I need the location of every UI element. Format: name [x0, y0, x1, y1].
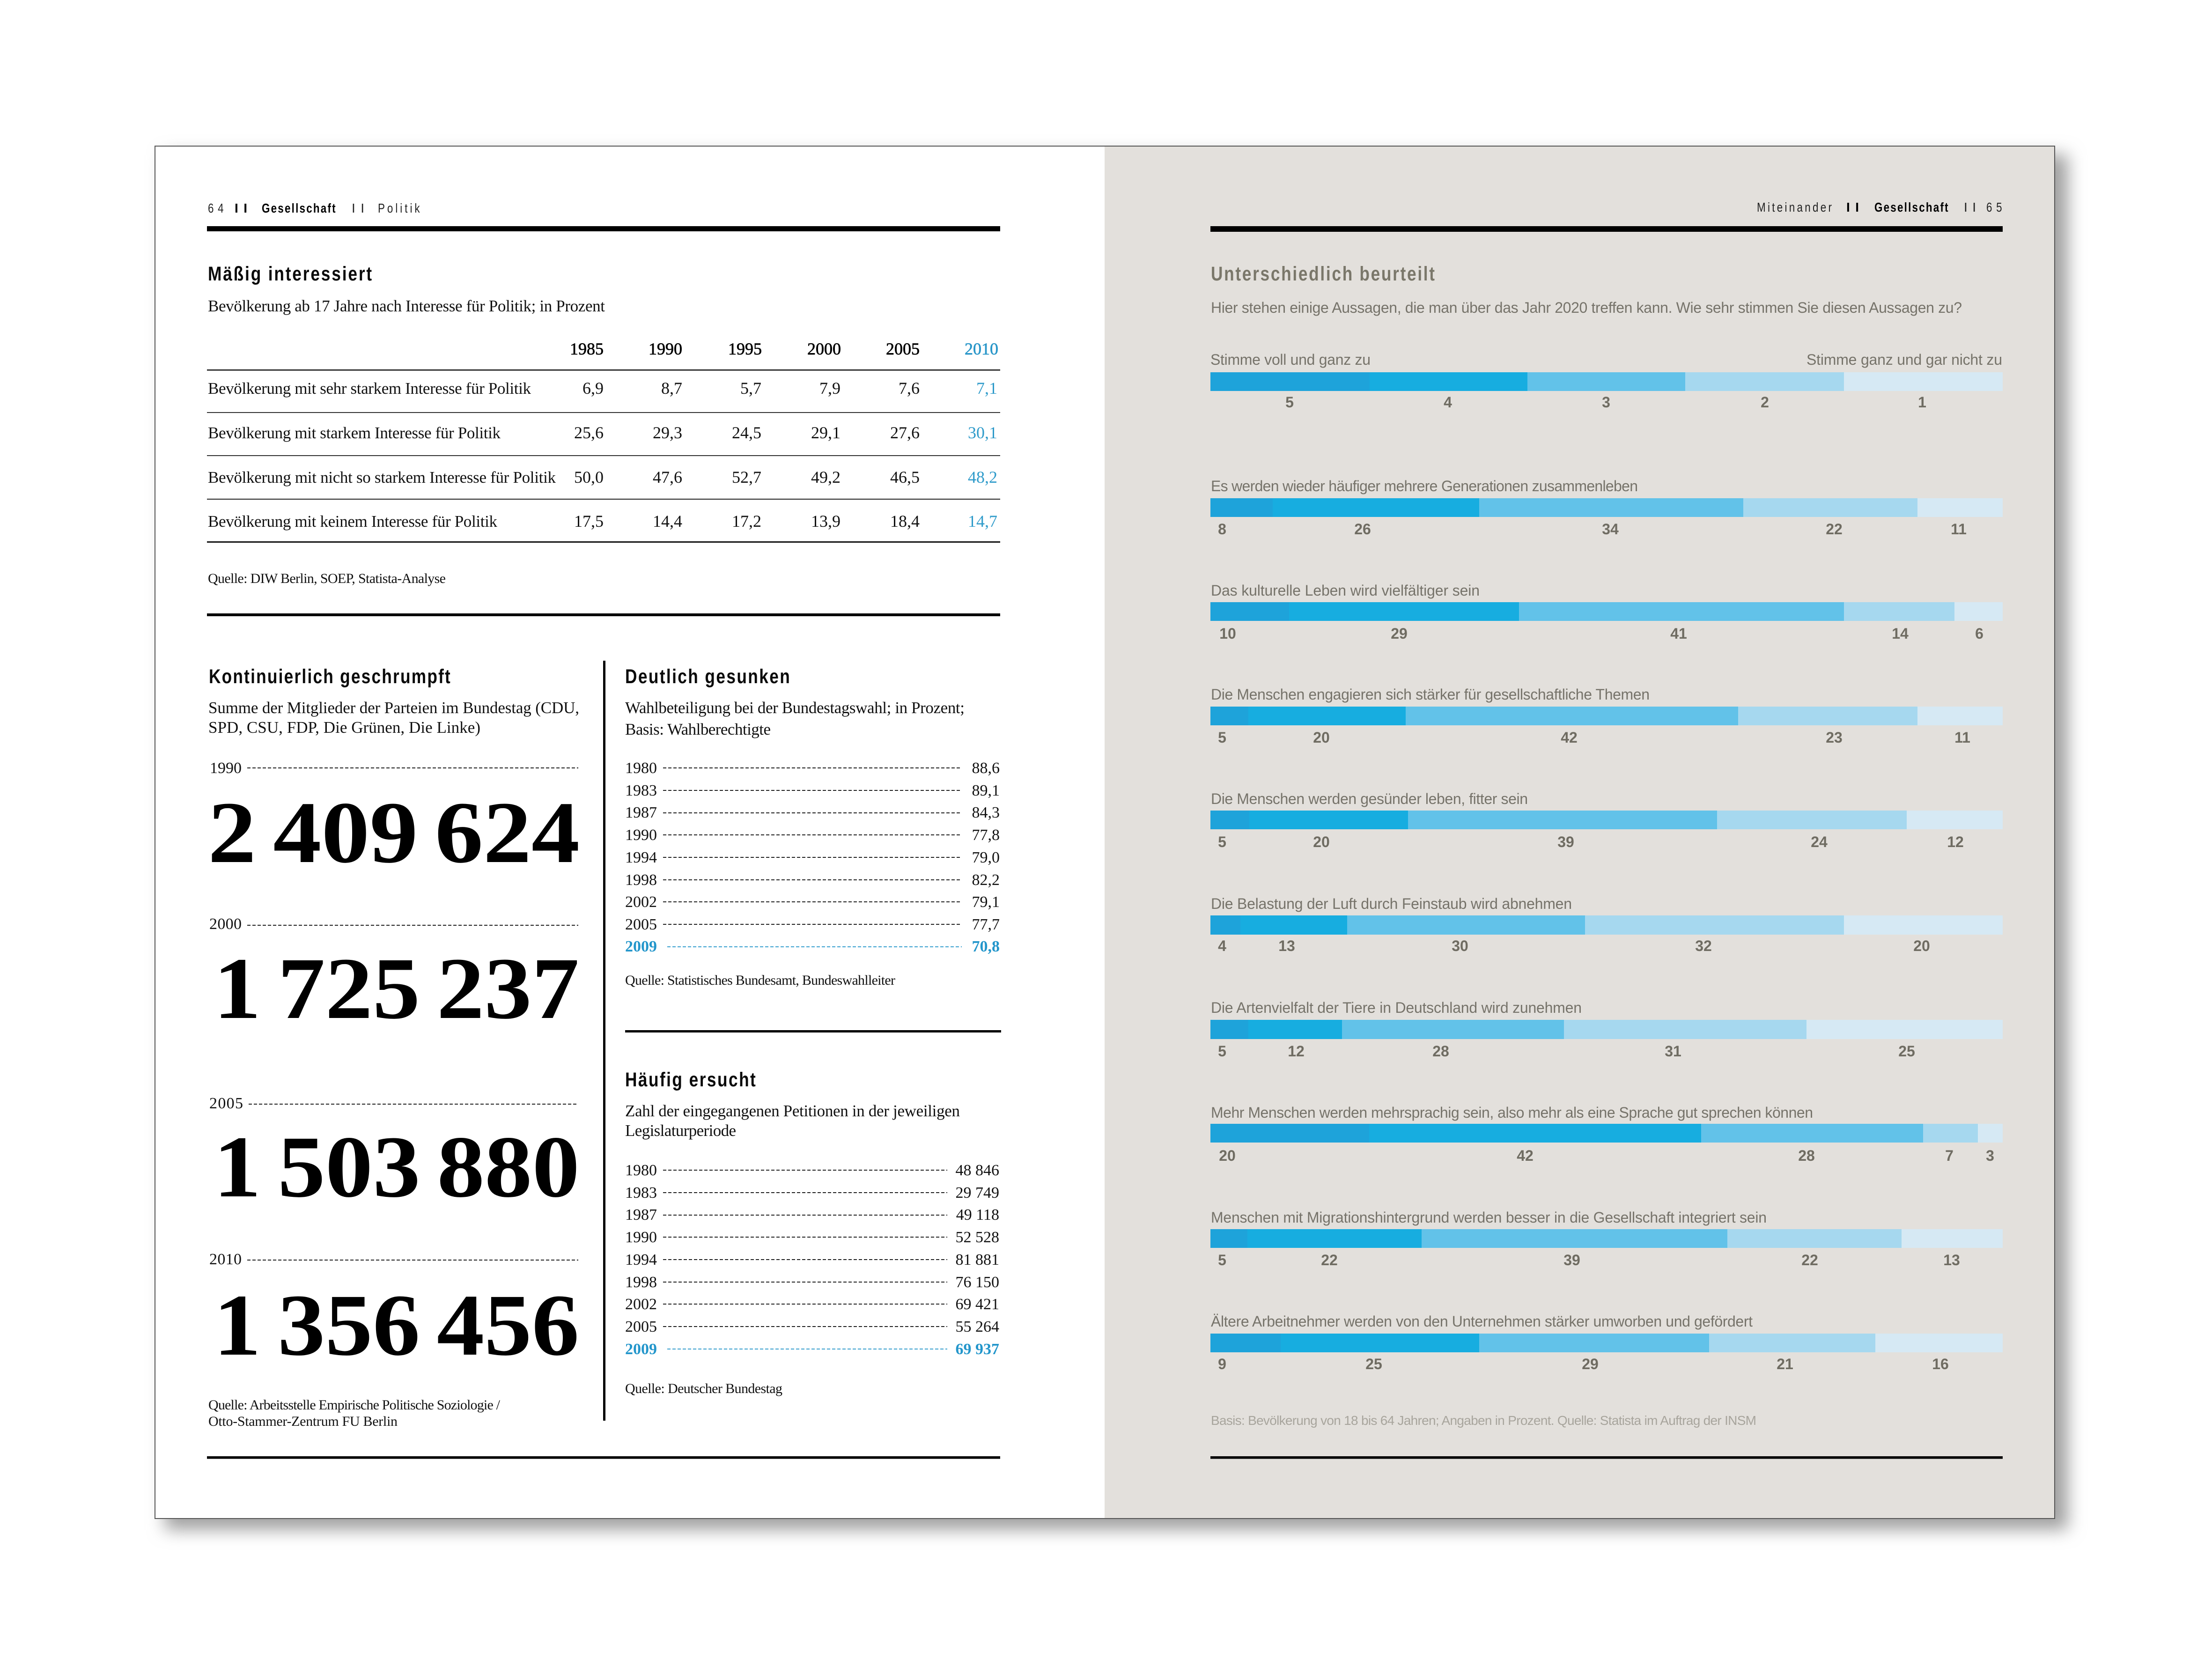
statement bar: Generationen: 26 — [1354, 521, 1371, 538]
table header years: 1990 — [649, 339, 682, 358]
table header years: 2000 — [807, 339, 841, 358]
table row: starkes Interesse: 25,6 — [574, 423, 604, 442]
statement bar: Artenvielfalt — [1210, 999, 2003, 1060]
table row: starkes Interesse: 24,5 — [732, 423, 761, 442]
table row: kein Interesse: 13,9 — [811, 512, 841, 531]
left page header: II — [235, 201, 247, 215]
table row: sehr starkes Interesse: 7,9 — [819, 379, 841, 398]
statement bar: kulturelles Leben: 41 — [1670, 625, 1687, 642]
statement bar: Gesundheit — [1210, 790, 2003, 850]
statement bar: Migrationshintergrund: 13 — [1943, 1252, 1960, 1268]
turnout list: 2009 — [625, 938, 657, 955]
statement bar: Feinstaub: Die Belastung der Luft durch Feinstaub wird abnehmen — [1211, 895, 1572, 912]
statement bar: Feinstaub: 32 — [1695, 937, 1712, 954]
source note: Basis: Bevölkerung von 18 bis 64 Jahren; Angaben in Prozent. Quelle: Statista im Auftrag der INSM — [1211, 1413, 1756, 1428]
petitions list: 1987 — [625, 1206, 657, 1224]
table row: kein Interesse — [208, 512, 997, 531]
member count 2005: 2005 — [209, 1095, 243, 1112]
left page header: Gesellschaft — [262, 201, 336, 216]
table row: starkes Interesse: 29,1 — [811, 423, 841, 442]
table row: sehr starkes Interesse: 7,1 — [976, 379, 997, 398]
turnout list: 1980 — [625, 759, 657, 777]
table row: kein Interesse: 14,4 — [653, 512, 682, 531]
statement bar: Migrationshintergrund: 39 — [1563, 1252, 1580, 1268]
statement bar: Engagement: Die Menschen engagieren sich stärker für gesellschaftliche Themen — [1211, 686, 1650, 703]
statement bar: Mehrsprachigkeit: 20 — [1219, 1147, 1236, 1164]
turnout list: 84,3 — [972, 804, 1000, 821]
statement bar: Migrationshintergrund: Menschen mit Migrationshintergrund werden besser in die Gesellschaft integriert sein — [1211, 1209, 1767, 1226]
subtitle: Hier stehen einige Aussagen, die man über das Jahr 2020 treffen kann. Wie sehr stimmen Sie diesen Aussagen zu? — [1211, 299, 1962, 316]
page drop shadow — [165, 155, 2068, 1530]
right page header: II — [1964, 200, 1976, 214]
legend scale bar: 3 — [1602, 394, 1610, 411]
table row: starkes Interesse: 29,3 — [653, 423, 682, 442]
right page header — [1757, 200, 2002, 215]
source: Quelle: DIW Berlin, SOEP, Statista-Analyse — [208, 571, 446, 586]
turnout list: 1994 — [625, 849, 657, 866]
panel: Deutlich gesunken — [625, 665, 1000, 988]
table row: starkes Interesse: 27,6 — [890, 423, 920, 442]
petitions list: 2009 — [625, 1341, 657, 1358]
left page background — [155, 146, 1105, 1519]
turnout list: 77,8 — [972, 826, 1000, 844]
turnout list: 2002 — [625, 893, 657, 911]
statement bar: Ältere Arbeitnehmer: 9 — [1218, 1356, 1226, 1372]
right page background — [1105, 146, 2055, 1519]
table row: starkes Interesse — [208, 423, 997, 442]
statement bar: Ältere Arbeitnehmer: 16 — [1932, 1356, 1949, 1372]
petitions list: 1998 — [625, 1274, 657, 1291]
heading: Kontinuierlich geschrumpft — [209, 665, 450, 688]
left page header — [208, 201, 420, 216]
table row: nicht so starkes Interesse: Bevölkerung mit nicht so starkem Interesse für Politik — [208, 468, 556, 487]
member count 2000: 2000 — [209, 915, 242, 933]
statement bar: Mehrsprachigkeit: Mehr Menschen werden mehrsprachig sein, also mehr als eine Sprache gut sprechen können — [1211, 1104, 1813, 1121]
right page header: Gesellschaft — [1874, 200, 1948, 215]
member count 2005: 1 503 880 — [214, 1118, 580, 1216]
legend scale bar: 1 — [1918, 394, 1926, 411]
petitions list: 1980 — [625, 1162, 657, 1179]
member count 2010: 2010 — [209, 1251, 242, 1268]
legend scale bar: 4 — [1444, 394, 1452, 411]
subtitle: Basis: Wahlberechtigte — [625, 720, 771, 738]
statement bar: Feinstaub: 30 — [1452, 937, 1468, 954]
legend scale bar — [1210, 351, 2003, 411]
petitions list: 81 881 — [955, 1251, 999, 1268]
subtitle — [625, 1102, 960, 1140]
table row: nicht so starkes Interesse: 52,7 — [732, 468, 761, 487]
petitions list: 76 150 — [955, 1274, 999, 1291]
table row: nicht so starkes Interesse — [208, 468, 997, 487]
petitions list: 52 528 — [955, 1229, 999, 1246]
petitions list: 2005 — [625, 1318, 657, 1335]
table row: nicht so starkes Interesse: 46,5 — [890, 468, 920, 487]
member count 1990: 2 409 624 — [208, 783, 580, 881]
petitions list: 1983 — [625, 1184, 657, 1202]
subtitle — [208, 699, 579, 737]
table row: sehr starkes Interesse: 6,9 — [582, 379, 604, 398]
table row: sehr starkes Interesse — [208, 379, 997, 398]
statement bar: Engagement: 5 — [1218, 729, 1226, 746]
turnout list: 88,6 — [972, 759, 1000, 777]
statement bar: Migrationshintergrund: 5 — [1218, 1252, 1226, 1268]
table row: nicht so starkes Interesse: 48,2 — [968, 468, 997, 487]
statement bar: Artenvielfalt: 25 — [1898, 1043, 1915, 1060]
statement bar: Mehrsprachigkeit: 7 — [1945, 1147, 1954, 1164]
petitions list: 55 264 — [955, 1318, 999, 1335]
statement bar: kulturelles Leben: Das kulturelle Leben wird vielfältiger sein — [1211, 582, 1480, 599]
left page header: II — [352, 201, 364, 215]
statement bar: Mehrsprachigkeit: 28 — [1798, 1147, 1815, 1164]
statement bar: Mehrsprachigkeit: 3 — [1986, 1147, 1994, 1164]
table row: kein Interesse: 17,2 — [732, 512, 761, 531]
statement bar: Artenvielfalt: Die Artenvielfalt der Tiere in Deutschland wird zunehmen — [1211, 999, 1582, 1016]
page outline — [155, 146, 2055, 1519]
table row: kein Interesse: Bevölkerung mit keinem Interesse für Politik — [208, 512, 497, 531]
table row: kein Interesse: 18,4 — [890, 512, 920, 531]
statement bar: kulturelles Leben: 6 — [1975, 625, 1983, 642]
statement bar: kulturelles Leben: 10 — [1219, 625, 1236, 642]
source — [208, 1397, 501, 1429]
right page header: 65 — [1986, 200, 2002, 215]
heading: Unterschiedlich beurteilt — [1211, 263, 1435, 285]
petitions list: 1990 — [625, 1229, 657, 1246]
statement bar: kulturelles Leben — [1210, 582, 2003, 642]
statement bar: Ältere Arbeitnehmer: 29 — [1582, 1356, 1599, 1372]
petitions list — [625, 1162, 999, 1358]
table row: sehr starkes Interesse: 7,6 — [899, 379, 920, 398]
right page header: Miteinander — [1757, 200, 1832, 215]
statement bar: Migrationshintergrund: 22 — [1321, 1252, 1338, 1268]
table header years — [570, 339, 998, 358]
table header years: 1995 — [728, 339, 762, 358]
statement bar: Generationen — [1210, 478, 2003, 538]
source: Quelle: Statistisches Bundesamt, Bundeswahlleiter — [625, 973, 895, 988]
table row: starkes Interesse: 30,1 — [968, 423, 997, 442]
statement bar: Artenvielfalt: 28 — [1432, 1043, 1449, 1060]
table row: kein Interesse: 17,5 — [574, 512, 604, 531]
table row: kein Interesse: 14,7 — [968, 512, 997, 531]
turnout list: 82,2 — [972, 871, 1000, 889]
legend scale bar: Stimme ganz und gar nicht zu — [1806, 351, 2002, 368]
statement bar: Gesundheit: 20 — [1313, 833, 1330, 850]
turnout list: 89,1 — [972, 782, 1000, 799]
statement bar: Generationen: 22 — [1826, 521, 1843, 538]
subtitle: Bevölkerung ab 17 Jahre nach Interesse für Politik; in Prozent — [208, 297, 605, 315]
subtitle — [625, 699, 965, 738]
statement bar: Engagement: 11 — [1954, 729, 1970, 746]
turnout list: 79,1 — [972, 893, 1000, 911]
statement bar: Artenvielfalt: 5 — [1218, 1043, 1226, 1060]
table row: starkes Interesse: Bevölkerung mit starkem Interesse für Politik — [208, 424, 501, 442]
turnout list: 1987 — [625, 804, 657, 821]
statement bar: Ältere Arbeitnehmer: 21 — [1777, 1356, 1793, 1372]
turnout list: 2005 — [625, 916, 657, 933]
table row: nicht so starkes Interesse: 49,2 — [811, 468, 841, 487]
statement bar: Ältere Arbeitnehmer — [1210, 1313, 2003, 1372]
source: Otto-Stammer-Zentrum FU Berlin — [208, 1414, 398, 1429]
statement bar: Engagement: 20 — [1313, 729, 1330, 746]
statement bar: Gesundheit: 39 — [1557, 833, 1574, 850]
subtitle: Zahl der eingegangenen Petitionen in der jeweiligen — [625, 1102, 960, 1120]
petitions list: 2002 — [625, 1296, 657, 1313]
petitions list: 1994 — [625, 1251, 657, 1268]
subtitle: Wahlbeteiligung bei der Bundestagswahl; in Prozent; — [625, 699, 965, 717]
panel: Mäßig interessiert table — [207, 263, 1000, 586]
petitions list: 49 118 — [956, 1206, 999, 1224]
panel: Unterschiedlich beurteilt — [1210, 263, 2003, 1428]
statement bar: Ältere Arbeitnehmer: 25 — [1365, 1356, 1382, 1372]
statement bar: Generationen: Es werden wieder häufiger mehrere Generationen zusammenleben — [1211, 478, 1638, 494]
table row: nicht so starkes Interesse: 47,6 — [653, 468, 682, 487]
member count 2000: 1 725 237 — [214, 939, 579, 1037]
right page header: II — [1846, 200, 1859, 214]
heading: Deutlich gesunken — [625, 665, 790, 688]
statement bar: Artenvielfalt: 31 — [1665, 1043, 1681, 1060]
statement bar: Migrationshintergrund: 22 — [1801, 1252, 1818, 1268]
left page header: 64 — [208, 201, 224, 216]
subtitle: SPD, CSU, FDP, Die Grünen, Die Linke) — [208, 718, 480, 737]
table header years: 2010 — [965, 339, 998, 358]
statement bar: Feinstaub: 20 — [1913, 937, 1930, 954]
turnout list: 77,7 — [972, 916, 1000, 933]
heading: Mäßig interessiert — [208, 263, 372, 285]
table header years: 1985 — [570, 339, 604, 358]
statement bar: Gesundheit: 5 — [1218, 833, 1226, 850]
statement bar: Engagement: 23 — [1826, 729, 1843, 746]
turnout list: 1983 — [625, 782, 657, 799]
statement bar: Gesundheit: Die Menschen werden gesünder leben, fitter sein — [1211, 790, 1528, 807]
left page header: Politik — [378, 201, 420, 216]
statement bar: kulturelles Leben: 14 — [1892, 625, 1909, 642]
table row: sehr starkes Interesse: 5,7 — [740, 379, 761, 398]
statement bar: Generationen: 11 — [1951, 521, 1967, 538]
statement bar: Generationen: 8 — [1218, 521, 1226, 538]
turnout list: 1990 — [625, 826, 657, 844]
petitions list: 69 421 — [955, 1296, 999, 1313]
table row: sehr starkes Interesse: Bevölkerung mit sehr starkem Interesse für Politik — [208, 379, 531, 398]
table header years: 2005 — [886, 339, 920, 358]
statement bar: Gesundheit: 12 — [1947, 833, 1964, 850]
legend scale bar: Stimme voll und ganz zu — [1210, 351, 1371, 368]
subtitle: Legislaturperiode — [625, 1121, 736, 1140]
source: Quelle: Deutscher Bundestag — [625, 1381, 782, 1396]
statement bar: Mehrsprachigkeit — [1210, 1104, 2003, 1164]
statement bar: Engagement — [1210, 686, 2003, 746]
member count 2010: 1 356 456 — [214, 1276, 579, 1374]
turnout list — [625, 759, 1000, 955]
petitions list: 48 846 — [955, 1162, 999, 1179]
subtitle: Summe der Mitglieder der Parteien im Bundestag (CDU, — [208, 699, 579, 717]
legend scale bar: 2 — [1761, 394, 1769, 411]
table row: nicht so starkes Interesse: 50,0 — [574, 468, 604, 487]
statement bar: Mehrsprachigkeit: 42 — [1517, 1147, 1534, 1164]
panel: Kontinuierlich geschrumpft — [208, 665, 580, 1429]
source: Quelle: Arbeitsstelle Empirische Politische Soziologie / — [208, 1397, 501, 1413]
statement bar: Feinstaub — [1210, 895, 2003, 954]
legend scale bar: 5 — [1285, 394, 1294, 411]
heading: Häufig ersucht — [625, 1069, 756, 1091]
panel: Häufig ersucht — [625, 1069, 999, 1396]
turnout list: 1998 — [625, 871, 657, 889]
petitions list: 29 749 — [955, 1184, 999, 1202]
statement bar: kulturelles Leben: 29 — [1391, 625, 1408, 642]
petitions list: 69 937 — [955, 1341, 999, 1358]
statement bar: Feinstaub: 4 — [1218, 937, 1226, 954]
statement bar: Engagement: 42 — [1561, 729, 1578, 746]
member count 1990: 1990 — [210, 759, 242, 777]
statement bar: Artenvielfalt: 12 — [1288, 1043, 1305, 1060]
statement bar: Generationen: 34 — [1602, 521, 1619, 538]
statement bar: Ältere Arbeitnehmer: Ältere Arbeitnehmer werden von den Unternehmen stärker umworben und gefördert — [1211, 1313, 1753, 1330]
table row: sehr starkes Interesse: 8,7 — [661, 379, 682, 398]
statement bar: Migrationshintergrund — [1210, 1209, 2003, 1268]
statement bar: Gesundheit: 24 — [1811, 833, 1828, 850]
turnout list: 79,0 — [972, 849, 1000, 866]
turnout list: 70,8 — [972, 938, 1000, 955]
statement bar: Feinstaub: 13 — [1278, 937, 1295, 954]
